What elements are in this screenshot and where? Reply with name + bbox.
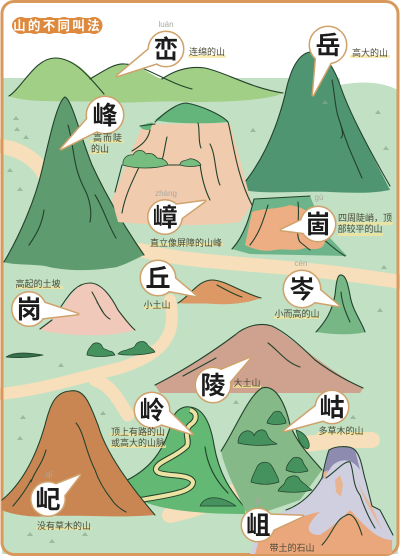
callout: qi: 屺	[35, 486, 61, 514]
mountain: ling 岭 with path	[123, 407, 245, 514]
caption: hu: 多草木的山	[318, 425, 364, 436]
callout: cen	[284, 259, 339, 307]
caption: ling: 顶上有路的山	[111, 426, 165, 437]
callout: luan: luán	[158, 20, 174, 29]
callout: ling	[135, 393, 192, 434]
callout: hu: 岵	[319, 394, 345, 422]
callout: zhang: 嶂	[152, 204, 178, 232]
callout: ju: jū	[255, 496, 262, 505]
callout: zhang: zhàng	[155, 189, 177, 198]
callout: qiu	[141, 261, 196, 296]
callout: gu: 崮	[305, 211, 331, 239]
caption: zhang: 直立像屏障的山峰	[150, 237, 222, 248]
callout: ju: 岨	[245, 512, 271, 540]
mountain: qi bare	[2, 391, 155, 517]
callout: feng: 峰	[92, 102, 118, 130]
caption: qi: 没有草木的山	[37, 520, 91, 531]
mountain: cen	[316, 275, 365, 334]
callout: luan	[117, 20, 183, 76]
mountain: ling (lu)	[155, 324, 363, 393]
caption: feng	[90, 132, 124, 154]
mountain: qiu mound	[178, 280, 261, 304]
callout: gang: 岗	[16, 296, 42, 324]
caption: ling: 或高大的山脉	[111, 437, 165, 448]
callout: qi	[32, 470, 80, 516]
callout: lu	[196, 358, 250, 402]
callout: gu	[281, 193, 335, 241]
mountain: yue	[240, 52, 390, 193]
callout: ju	[242, 496, 303, 541]
caption: qiu: 小土山	[143, 299, 171, 310]
caption: luan: 连绵的山	[189, 46, 225, 57]
caption: ling	[110, 426, 166, 448]
callout: qiu: 丘	[145, 265, 171, 293]
caption: lu: 大土山	[233, 377, 261, 388]
callout: feng	[61, 97, 123, 149]
caption: gu: 四周陡峭，顶	[338, 212, 392, 223]
callout: cen: 岑	[289, 276, 315, 304]
callout: luan: 峦	[153, 35, 179, 64]
callout: gang	[12, 292, 78, 326]
mountain: gang mound	[40, 283, 135, 335]
caption: cen: 小而高的山	[274, 308, 320, 319]
callout: cen: cén	[295, 259, 307, 268]
mountain: luan range	[9, 58, 283, 103]
caption: gang: 高起的土坡	[15, 278, 61, 289]
mountain: gu plateau	[232, 196, 347, 256]
mountain: feng	[4, 97, 144, 270]
mountain: ju stony	[250, 447, 393, 554]
title: 山的不同叫法	[13, 18, 102, 33]
caption: yue: 高大的山	[352, 47, 388, 58]
callout: yue: 岳	[315, 32, 341, 60]
mountain: zhang cliff	[112, 103, 252, 225]
caption: feng: 高而陡	[93, 132, 123, 143]
callout: gu: gù	[315, 193, 323, 202]
mountain: hu grassy	[221, 387, 322, 512]
callout: lu: 陵	[200, 372, 226, 400]
caption: gu: 部较平的山	[337, 223, 383, 234]
callout: ling: 岭	[139, 397, 165, 425]
caption: ju: 带土的石山	[269, 542, 315, 553]
callout: zhang	[148, 189, 205, 234]
roads	[0, 146, 400, 515]
caption: gu	[337, 212, 393, 236]
caption: feng: 的山	[91, 143, 109, 154]
shrubs near gang	[6, 342, 155, 358]
small decorative grass	[7, 100, 389, 543]
callout: qi: qǐ	[46, 470, 53, 479]
callout: yue	[310, 27, 346, 95]
callout: hu	[284, 391, 348, 431]
